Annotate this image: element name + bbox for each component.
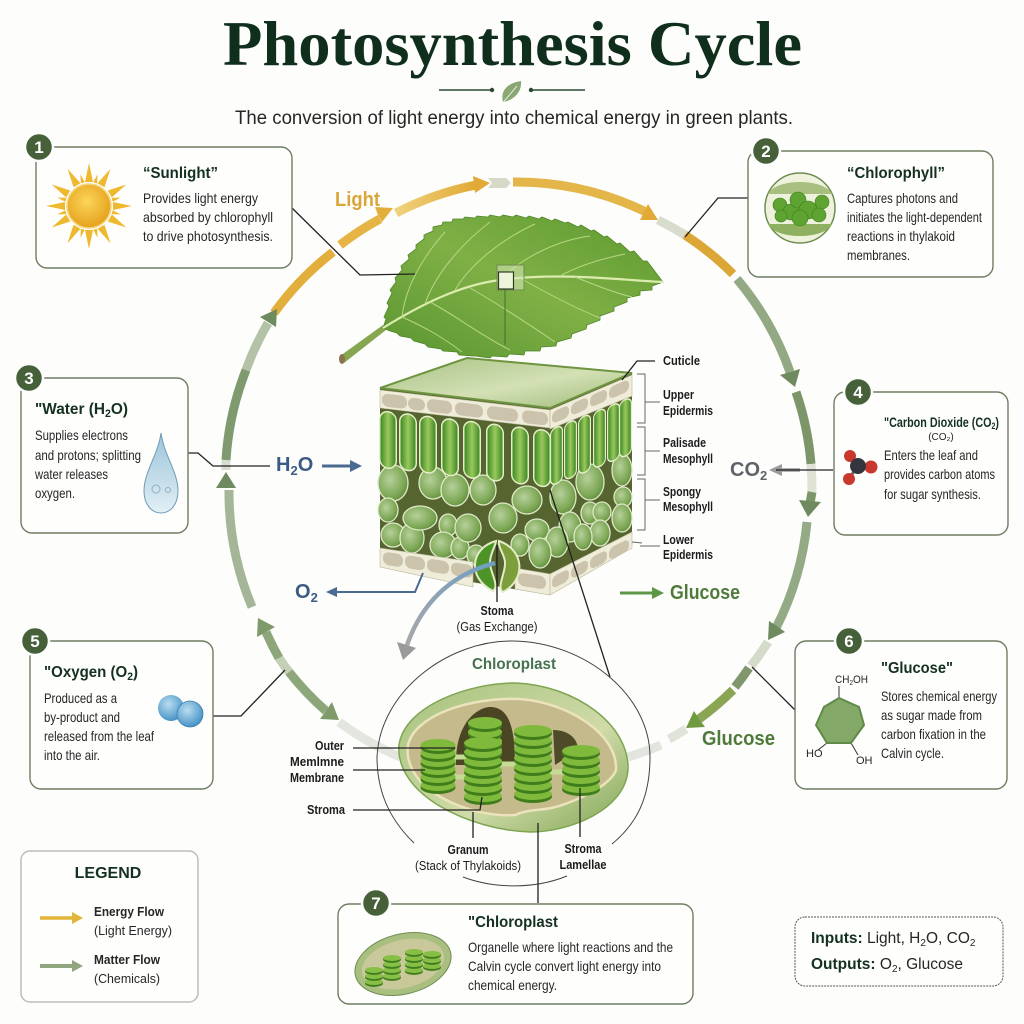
subtitle: The conversion of light energy into chemical energy in green plants. [235, 107, 793, 129]
card text [847, 165, 982, 263]
badge 2 [752, 137, 780, 165]
badge 6: 6 [844, 632, 854, 651]
block top surface [380, 358, 632, 408]
card text: to drive photosynthesis. [143, 228, 273, 244]
card text: "Water (H [35, 401, 108, 418]
badge 4: 4 [853, 383, 863, 402]
card text: "Glucose" [881, 660, 953, 677]
chloroplast heading: Chloroplast [472, 656, 556, 673]
water input label and arrow [276, 454, 362, 478]
chloroplast part labels [290, 738, 606, 903]
inner membrane [408, 699, 616, 815]
carbon dioxide label and arrow: 2 [760, 468, 767, 483]
light ring label: Light [335, 189, 380, 211]
glucose ring label: Glucose [702, 728, 775, 750]
card text: Stores chemical energy [881, 688, 997, 704]
card text: “Sunlight” [143, 165, 218, 182]
card text: "Carbon Dioxide (CO [884, 414, 1024, 430]
dark stroma cavities [456, 707, 515, 765]
card text: as sugar made from [881, 707, 982, 723]
leaf cross-section block [378, 358, 632, 602]
leaf veins [383, 222, 663, 352]
oxygen output label and arrow: 2 [311, 590, 318, 605]
carbon dioxide label and arrow: CO [730, 459, 760, 481]
cross-section layer labels: Epidermis [663, 403, 713, 418]
card text: 2 [992, 421, 995, 431]
chloroplast part labels: Granum [448, 842, 488, 857]
chloroplast part labels: Lamellae [560, 857, 606, 872]
icon: CO2 molecule [843, 450, 878, 485]
legend panel: LEGEND [75, 865, 141, 882]
badge 7: 7 [371, 894, 381, 913]
connector lines from cards to cycle [188, 198, 833, 716]
card text: "Oxygen (O [44, 664, 132, 681]
legend panel [21, 851, 198, 1002]
card text: reactions in thylakoid [847, 228, 955, 244]
title: Photosynthesis Cycle [223, 9, 802, 79]
card text: Organelle where light reactions and the [468, 939, 673, 955]
chloroplast part labels: Membrane [290, 770, 344, 785]
card text: membranes. [847, 247, 910, 263]
card text: Calvin cycle. [881, 745, 944, 761]
inputs and outputs summary: , Glucose [898, 956, 963, 973]
icon: glucose ring: OH [853, 674, 868, 686]
badge 7 [362, 889, 390, 917]
cross-section layer labels [622, 353, 713, 562]
inputs and outputs summary: 2 [970, 938, 976, 949]
cross-section layer labels: Upper [663, 387, 694, 402]
stroma lamellae [450, 757, 565, 777]
granum stacks [421, 717, 600, 805]
inputs and outputs summary: 2 [892, 964, 898, 975]
oxygen output label and arrow [295, 573, 423, 605]
card text [881, 660, 997, 761]
energy flow legend item [40, 904, 172, 938]
cross-section layer labels: Palisade [663, 435, 706, 450]
icon: chlorophyll cell circle [765, 173, 835, 243]
water input label and arrow: O [298, 454, 313, 476]
card text: Calvin cycle convert light energy into [468, 958, 661, 974]
card text: Provides light energy [143, 190, 258, 206]
card text: water releases [34, 466, 108, 482]
chloroplast part labels: Stroma [307, 802, 346, 817]
upper epidermis [380, 375, 632, 429]
card text: chemical energy. [468, 977, 557, 993]
card text: ) [995, 414, 999, 430]
cross-section layer labels: Cuticle [663, 353, 700, 368]
leaf sample square [497, 265, 524, 345]
stoma label: Stoma [480, 603, 514, 618]
badge 5 [21, 627, 49, 655]
panel: 7 Chloroplast [338, 889, 693, 1005]
card text [44, 664, 154, 763]
inputs and outputs summary [795, 917, 1003, 986]
icon: glucose ring: CH [835, 674, 851, 686]
badge 6 [835, 627, 863, 655]
chloroplast part labels: (Stack of Thylakoids) [415, 858, 521, 873]
card text: carbon fixation in the [881, 726, 986, 742]
card text: into the air. [44, 747, 100, 763]
grey curved gas arrow [397, 563, 495, 660]
matter flow legend item [40, 952, 161, 986]
card text: released from the leaf [44, 728, 154, 744]
card text [468, 914, 673, 993]
icon: mini chloroplast [348, 923, 458, 1005]
spongy mesophyll cells [378, 454, 632, 568]
badge 4 [844, 378, 872, 406]
chloroplast illustration [399, 683, 628, 832]
card text [884, 414, 999, 502]
card text: ) [133, 664, 138, 681]
card text [143, 165, 273, 244]
leaf illustration [339, 215, 663, 364]
icon: oxygen spheres [158, 695, 203, 727]
card text: oxygen. [35, 485, 75, 501]
chloroplast part labels: Stroma [564, 841, 602, 856]
cross-section layer labels: Spongy [663, 484, 702, 499]
connector from cross-section to chloroplast [550, 490, 610, 677]
water input label and arrow: H [276, 454, 290, 476]
card text [34, 401, 141, 501]
water input label and arrow: 2 [290, 463, 298, 478]
stoma label: (Gas Exchange) [456, 619, 538, 634]
card text: by-product and [44, 709, 120, 725]
panel: 4 Carbon Dioxide [834, 378, 1008, 535]
carbon dioxide label and arrow [730, 459, 800, 483]
badge 5: 5 [30, 632, 40, 651]
glucose output label and arrow: Glucose [670, 582, 740, 604]
cross-section layer labels: Lower [663, 532, 694, 547]
chloroplast part labels: Memlmne [290, 754, 344, 769]
badge 3: 3 [24, 369, 34, 388]
badge 2: 2 [761, 142, 771, 161]
panel: 1 Sunlight [25, 133, 292, 268]
cross-section layer labels: Mesophyll [663, 499, 713, 514]
palisade mesophyll cells [379, 396, 632, 488]
icon: sun [46, 163, 132, 249]
icon: water drop [144, 433, 178, 513]
panel: 2 Chlorophyll [748, 137, 993, 277]
matter flow legend item: Matter Flow [94, 952, 161, 967]
stoma guard cells [475, 541, 519, 602]
card text: Captures photons and [847, 190, 958, 206]
card text: absorbed by chlorophyll [143, 209, 273, 225]
glucose output label and arrow [620, 582, 740, 604]
oxygen output label and arrow: O [295, 581, 311, 603]
matter flow legend item: (Chemicals) [94, 971, 160, 986]
card text: and protons; splitting [35, 447, 141, 463]
card text: O) [111, 401, 128, 418]
card text: for sugar synthesis. [884, 486, 981, 502]
stoma label [456, 603, 538, 634]
card text: "Chloroplast [468, 914, 559, 931]
card text: Supplies electrons [35, 427, 128, 443]
chloroplast enclosing arcs [377, 641, 650, 886]
cross-section layer labels: Mesophyll [663, 451, 713, 466]
energy flow legend item: Energy Flow [94, 904, 165, 919]
card text: “Chlorophyll” [847, 165, 945, 182]
cross-section layer labels: Epidermis [663, 547, 713, 562]
panel: 5 Oxygen [21, 627, 213, 789]
card text: provides carbon atoms [884, 466, 995, 482]
chloroplast part labels: Outer [315, 738, 344, 753]
inputs and outputs summary: Inputs: Light, H [811, 930, 920, 947]
card text: (CO₂) [928, 432, 954, 443]
badge 1: 1 [34, 138, 44, 157]
inputs and outputs summary: O, CO [926, 930, 970, 947]
card text: Produced as a [44, 690, 117, 706]
icon: glucose ring [806, 674, 873, 767]
panel: 6 Glucose [795, 627, 1007, 789]
icon: glucose ring: HO [806, 748, 823, 760]
card text: 2 [127, 671, 133, 683]
energy flow legend item: (Light Energy) [94, 923, 172, 938]
card text: Enters the leaf and [884, 447, 978, 463]
panel: 3 Water [15, 364, 188, 533]
inputs and outputs summary: Outputs: O [811, 956, 892, 973]
inputs and outputs summary: 2 [920, 938, 926, 949]
card text: 2 [105, 408, 111, 420]
icon: glucose ring: 2 [849, 680, 853, 687]
icon: glucose ring: OH [856, 755, 873, 767]
circular cycle ring with arrows [216, 176, 821, 757]
card text: initiates the light-dependent [847, 209, 982, 225]
badge 3 [15, 364, 43, 392]
block body [380, 373, 632, 595]
badge 1 [25, 133, 53, 161]
lower epidermis [380, 532, 632, 595]
title ornament with leaf [439, 81, 585, 105]
